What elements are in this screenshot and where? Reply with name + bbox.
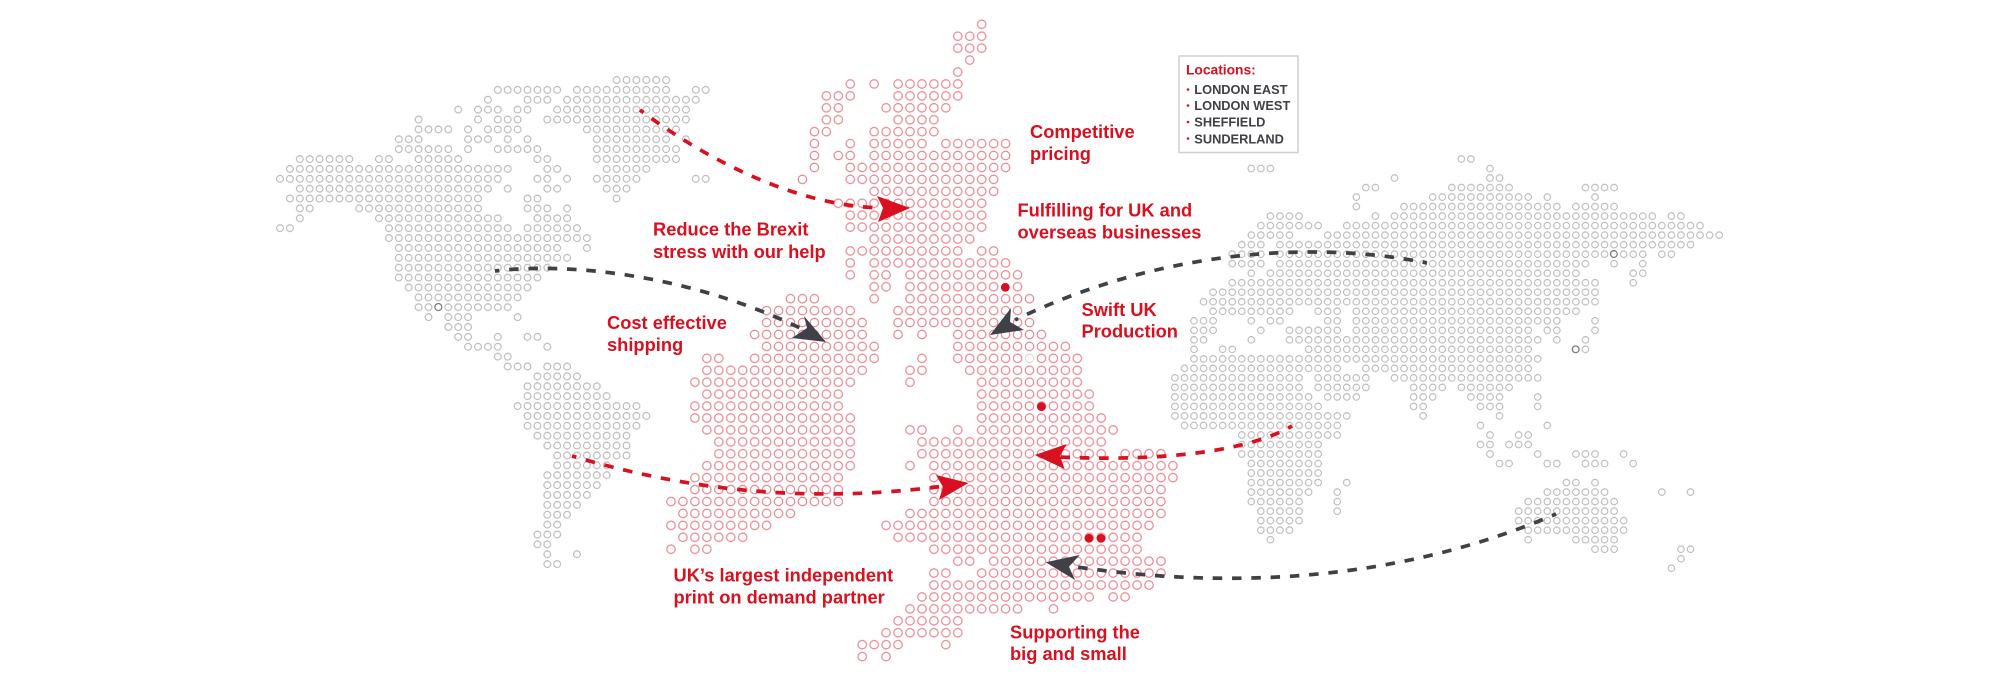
label: cost effective shipping: shipping (607, 334, 683, 355)
dot map: United Kingdom and Ireland (665, 24, 1179, 657)
legend: locations: LONDON WEST (1194, 98, 1290, 113)
label: fulfilling for UK and overseas businesses: overseas businesses (1018, 222, 1201, 243)
dot map: Eurasia, Africa and Australia (1170, 159, 1724, 568)
label: swift UK production: Swift UK (1082, 299, 1157, 320)
legend: locations: SUNDERLAND (1194, 131, 1284, 146)
label: reduce the Brexit stress: Reduce the Brexit (653, 218, 808, 240)
label: UK's largest independent print on demand partner: print on demand partner (674, 587, 885, 608)
legend: locations: LONDON EAST (1194, 82, 1288, 97)
label: reduce the Brexit stress: stress with our help (653, 241, 826, 262)
arrow: Australia to southern England (1046, 514, 1556, 580)
label: fulfilling for UK and overseas businesses: Fulfilling for UK and (1018, 200, 1192, 221)
label: supporting the big and small: Supporting the (1010, 621, 1140, 642)
arrow: South America to England (572, 456, 968, 500)
legend: locations (1179, 56, 1298, 152)
legend: locations: Locations: (1186, 62, 1256, 77)
location markers (1001, 283, 1105, 543)
arrow: Asia to northern England (990, 252, 1427, 335)
label: competitive pricing: Competitive (1030, 121, 1135, 142)
label: cost effective shipping: Cost effective (607, 312, 727, 333)
label: swift UK production: Production (1082, 321, 1178, 342)
arrow: Greenland to Scotland (640, 110, 910, 222)
pale ring on UK map (1024, 353, 1034, 363)
label: supporting the big and small: big and small (1010, 643, 1127, 664)
arrow: Africa to England (1035, 426, 1292, 469)
label: UK's largest independent print on demand partner: UK’s largest independent (674, 565, 893, 586)
arrow: North America to Ireland (495, 268, 826, 342)
dot map: Americas and Greenland (275, 80, 711, 564)
pale ring outline (1025, 354, 1034, 363)
legend: locations: SHEFFIELD (1194, 115, 1265, 130)
dot map: darker accent rings (435, 251, 1617, 353)
label: competitive pricing: pricing (1030, 143, 1091, 164)
